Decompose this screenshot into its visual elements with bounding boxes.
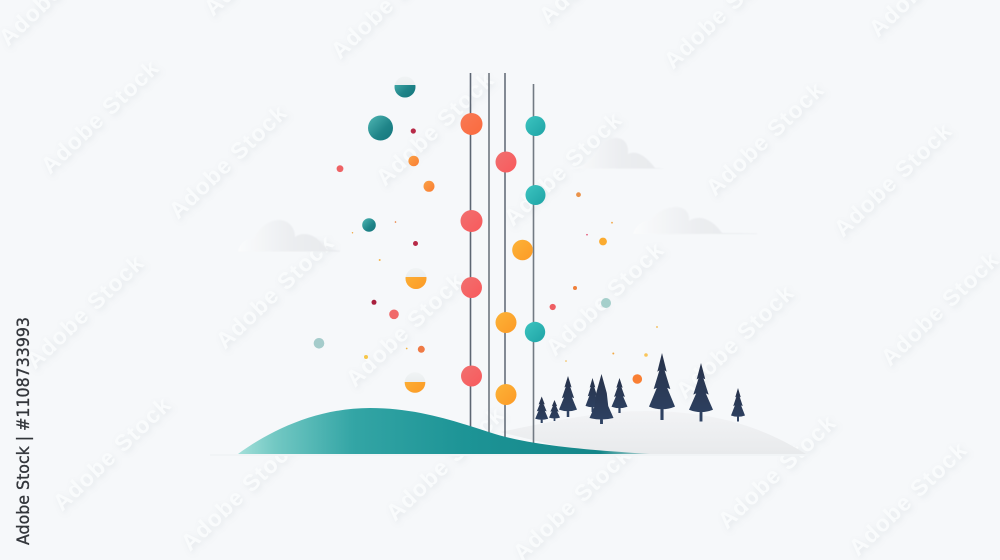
stock credit text: Adobe Stock | #1108733993	[14, 317, 34, 545]
watermark pattern: Adobe Stock	[20, 250, 148, 374]
watermark pattern: Adobe Stock	[340, 268, 468, 392]
sphere	[512, 240, 533, 260]
half sphere: teal	[394, 81, 416, 98]
spheres on strings	[460, 113, 546, 405]
sphere	[526, 116, 546, 136]
watermark pattern: Adobe Stock	[540, 237, 668, 361]
watermark pattern: Adobe Stock	[35, 55, 163, 179]
vertical strings	[470, 73, 534, 444]
sphere	[496, 152, 516, 172]
watermark pattern: Adobe Stock	[163, 100, 291, 224]
half-filled spheres	[394, 76, 426, 393]
watermark pattern: Adobe Stock	[875, 247, 1000, 371]
watermark pattern: Adobe Stock	[47, 392, 175, 516]
tree	[559, 376, 577, 417]
sphere	[496, 312, 516, 333]
watermark pattern: Adobe Stock	[828, 118, 956, 242]
floating dots: left	[314, 116, 434, 359]
half sphere: orange bottom	[404, 376, 426, 393]
watermark pattern: Adobe Stock	[498, 107, 626, 231]
sphere	[461, 277, 482, 298]
sphere	[496, 384, 516, 405]
watermark pattern: Adobe Stock	[843, 437, 971, 560]
tree	[612, 378, 628, 413]
cloud: left	[238, 220, 340, 252]
cloud: middle right	[633, 207, 757, 234]
tree	[535, 396, 548, 423]
string 3	[504, 73, 506, 438]
teal hill	[238, 408, 650, 454]
watermark pattern: Adobe Stock	[380, 402, 508, 526]
watermark pattern: Adobe Stock	[175, 432, 303, 556]
tree	[649, 353, 675, 420]
tree	[590, 374, 614, 424]
watermark pattern: Adobe Stock	[210, 230, 338, 354]
floating dots: right	[550, 192, 658, 384]
tree	[586, 378, 600, 412]
string 2	[488, 73, 490, 435]
watermark pattern: Adobe Stock	[370, 67, 498, 191]
pine trees	[535, 353, 745, 424]
watermark pattern: Adobe Stock	[670, 280, 798, 404]
tree	[689, 363, 713, 422]
sphere	[460, 113, 482, 135]
watermark pattern: Adobe Stock	[712, 410, 840, 534]
sphere	[525, 322, 545, 342]
cloud: top right	[570, 138, 665, 169]
watermark pattern: Adobe Stock	[700, 77, 828, 201]
string 4	[532, 84, 534, 444]
half sphere: orange top	[406, 272, 426, 289]
sphere	[460, 210, 482, 232]
sphere	[461, 366, 482, 386]
string 1	[470, 73, 472, 431]
ground line	[210, 454, 810, 456]
sphere	[526, 185, 546, 205]
tree	[731, 388, 745, 422]
snow hill	[500, 411, 806, 454]
tree	[549, 400, 560, 421]
